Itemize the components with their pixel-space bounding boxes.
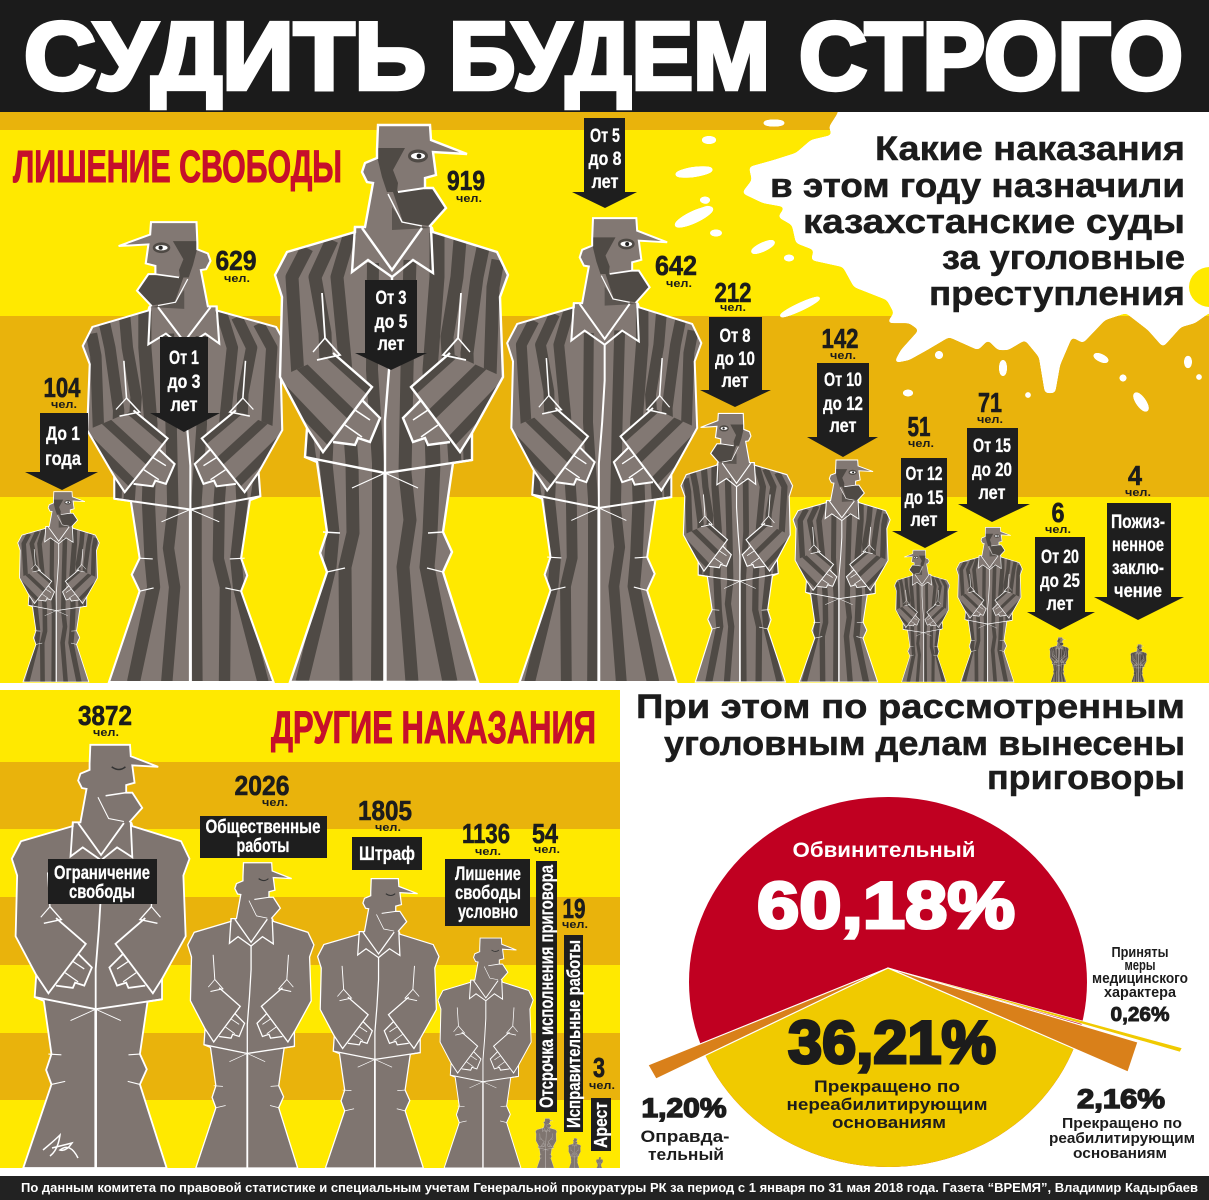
arrow: 1 to 3 years [150, 337, 220, 432]
count: 6 [1045, 497, 1071, 536]
count: 51: 51 [908, 411, 930, 442]
figure: arrest [596, 1157, 603, 1168]
label: exonerating: реабилитирующим [1049, 1130, 1195, 1147]
count: 629: 629 [216, 245, 256, 276]
count: 1805: чел. [375, 822, 401, 834]
arrow: 15 to 20 years: От 15 [973, 436, 1011, 457]
label: non-exonerating: Прекращено по [814, 1077, 960, 1096]
figure: 20 to 25 years [1049, 637, 1069, 682]
count: 19: чел. [562, 919, 588, 931]
label: suspended sentence [445, 859, 530, 926]
heading: deprivation of liberty: ЛИШЕНИЕ СВОБОДЫ [13, 141, 342, 192]
arrow: up to 1 year: До 1 [46, 424, 80, 445]
pie slice: medical measures [888, 968, 1182, 1052]
arrow: up to 1 year: года [45, 449, 81, 470]
figure: suspended sentence [438, 938, 533, 1168]
count: 104 [44, 372, 81, 411]
heading: what punishments: преступления [929, 275, 1185, 313]
arrow: 20 to 25 years [1027, 537, 1095, 630]
label: acquitted [640, 1093, 730, 1164]
count: 104: 104 [44, 372, 81, 403]
count: 2026: 2026 [234, 770, 290, 801]
label: restriction of liberty [48, 859, 157, 904]
count: 54: чел. [534, 844, 560, 856]
count: 212 [714, 277, 752, 314]
arrow: 8 to 10 years: до 10 [715, 349, 755, 370]
figure: up to 1 year [18, 492, 99, 682]
figure: community service [188, 863, 314, 1168]
figure: 10 to 12 years [793, 460, 890, 682]
label: exonerating: Прекращено по [1062, 1115, 1182, 1132]
label: non-exonerating: нереабилитирующим [786, 1095, 988, 1114]
white paint splash [672, 90, 1209, 415]
count: 212: 212 [714, 277, 752, 308]
arrow: 20 to 25 years: до 25 [1040, 571, 1080, 592]
striped background bands [0, 690, 620, 1168]
arrow: 15 to 20 years [958, 428, 1030, 522]
label: acquitted: 1,20% [642, 1093, 726, 1123]
arrow: 8 to 10 years: лет [722, 371, 748, 392]
label: suspended sentence: свободы [455, 883, 521, 904]
figure: life sentence [1130, 644, 1147, 682]
count: 1136: чел. [475, 846, 501, 858]
header band with title: СУДИТЬ [24, 3, 426, 110]
footer source line: По данным комитета по правовой статистике и специальным учетам Генеральной прокуратуры РК за период с 1 января по 31 мая 2018 года. Газета “ВРЕМЯ”, Владимир Кадырбаев [21, 1180, 1198, 1195]
arrow: 1 to 3 years: От 1 [169, 348, 199, 369]
count: 19: 19 [562, 893, 586, 924]
count: 104: чел. [51, 399, 77, 411]
arrow: 12 to 15 years: От 12 [906, 464, 942, 485]
arrow: 20 to 25 years: От 20 [1041, 547, 1079, 568]
label: fine: Штраф [359, 844, 415, 865]
arrow: 5 to 8 years: лет [592, 172, 618, 193]
arrow: life sentence: чение [1114, 581, 1162, 602]
arrow: 1 to 3 years: лет [170, 395, 198, 416]
count: 4: 4 [1128, 460, 1142, 491]
chart: verdicts pie [640, 797, 1195, 1167]
label: suspended sentence: условно [458, 902, 518, 923]
count: 212: чел. [720, 302, 746, 314]
arrow: 5 to 8 years [572, 118, 637, 208]
count: 6: 6 [1052, 497, 1064, 528]
count: 1136 [462, 818, 510, 858]
count: 3 [589, 1052, 615, 1092]
arrow: 10 to 12 years: до 12 [823, 394, 863, 415]
label: exonerating [1049, 1084, 1195, 1162]
arrow: 3 to 5 years: лет [378, 334, 404, 355]
pie slice: acquitted [648, 968, 888, 1079]
arrow: 12 to 15 years [892, 458, 958, 548]
figure: 5 to 8 years [507, 218, 701, 682]
label: medical measures: 0,26% [1110, 1004, 1170, 1026]
arrow: 1 to 3 years: до 3 [168, 372, 200, 393]
arrow: 3 to 5 years [355, 280, 427, 370]
count: 3: 3 [593, 1052, 605, 1083]
arrow: 10 to 12 years: От 10 [824, 370, 862, 391]
count: 3872: 3872 [78, 700, 132, 731]
heading: verdicts: уголовным делам вынесены [664, 725, 1185, 763]
yellow drop on right edge [1189, 267, 1209, 307]
figure: 12 to 15 years [894, 550, 950, 682]
panel: deprivation of liberty [0, 90, 1209, 683]
figure: fine [318, 879, 439, 1168]
panel: other punishments [0, 690, 620, 1168]
count: 142: чел. [830, 350, 856, 362]
count: 642: чел. [666, 278, 692, 290]
count: 629 [216, 245, 256, 285]
count: 1136: 1136 [462, 818, 510, 849]
figure: 8 to 10 years [681, 413, 793, 682]
count: 4: чел. [1125, 487, 1151, 499]
figure: deferred sentence [535, 1118, 557, 1168]
label: community service: работы [236, 836, 290, 857]
count: 4 [1125, 460, 1151, 499]
count: 642: 642 [655, 250, 697, 281]
label: arrest: Арест [591, 1102, 611, 1148]
count: 3: чел. [589, 1080, 615, 1092]
count: 919: 919 [447, 165, 485, 196]
label: exonerating: 2,16% [1077, 1084, 1165, 1114]
label: community service [200, 816, 327, 858]
label: medical measures: Приняты [1112, 944, 1168, 961]
label: medical measures: характера [1104, 984, 1177, 1001]
heading: verdicts [636, 688, 1185, 797]
count: 6: чел. [1045, 524, 1071, 536]
label: community service: Общественные [206, 817, 320, 838]
arrow: life sentence [1094, 503, 1184, 620]
count: 142 [822, 323, 858, 362]
count: 919: чел. [456, 193, 482, 205]
label: non-exonerating [786, 1009, 996, 1132]
count: 71 [977, 387, 1003, 426]
label: guilty: 60,18% [757, 868, 1015, 942]
figure: correctional labour [568, 1138, 581, 1168]
heading: what punishments [770, 130, 1185, 313]
footer source line [0, 1176, 1209, 1200]
count: 1805: 1805 [358, 795, 412, 826]
count: 51: чел. [908, 438, 934, 450]
label: deferred sentence: Отсрочка исполнения приговора [537, 865, 558, 1108]
arrow: 8 to 10 years: От 8 [720, 326, 750, 347]
count: 19 [562, 893, 588, 931]
header band with title: СТРОГО [799, 3, 1183, 110]
arrow: 5 to 8 years: От 5 [590, 126, 620, 147]
arrow: 5 to 8 years: до 8 [588, 149, 622, 170]
arrow: life sentence: Пожиз- [1111, 512, 1165, 533]
label: correctional labour: Исправительные работы [564, 940, 584, 1128]
label: restriction of liberty: Ограничение [54, 863, 150, 884]
label: non-exonerating: основаниям [832, 1113, 946, 1132]
heading: what punishments: Какие наказания [875, 130, 1185, 168]
arrow: life sentence: ненное [1112, 535, 1164, 556]
count: 2026: чел. [262, 797, 288, 809]
label: guilty: Обвинительный [792, 839, 976, 862]
heading: what punishments: за уголовные [942, 239, 1185, 277]
label: medical measures: медицинского [1092, 970, 1188, 987]
pie slice: terminated exonerating [888, 968, 1138, 1072]
arrow: life sentence: заклю- [1112, 558, 1164, 579]
arrow: 10 to 12 years: лет [830, 416, 856, 437]
count: 3872: чел. [93, 727, 119, 739]
heading: what punishments: казахстанские суды [803, 203, 1185, 241]
figure: 1 to 3 years [83, 222, 287, 682]
pie slice: guilty [689, 797, 1087, 1167]
heading: verdicts: приговоры [987, 759, 1185, 797]
count: 629: чел. [224, 273, 250, 285]
figure: restriction of liberty [12, 745, 189, 1168]
arrow: up to 1 year [25, 413, 98, 490]
count: 71: чел. [977, 414, 1003, 426]
heading: what punishments: в этом году назначили [770, 167, 1185, 205]
arrow: 15 to 20 years: до 20 [972, 460, 1012, 481]
arrow: 12 to 15 years: лет [910, 510, 938, 531]
count: 919 [447, 165, 485, 205]
arrow: 12 to 15 years: до 15 [904, 488, 944, 509]
heading: other punishments: ДРУГИЕ НАКАЗАНИЯ [271, 702, 596, 753]
artist signature [43, 1135, 78, 1158]
arrow: 20 to 25 years: лет [1046, 594, 1074, 615]
figure: 15 to 20 years [956, 527, 1022, 682]
arrow: 10 to 12 years [807, 363, 878, 457]
figure: 3 to 5 years [275, 125, 508, 682]
label: guilty [757, 839, 1015, 942]
count: 51 [908, 411, 934, 450]
header band with title: БУДЕМ [449, 3, 770, 110]
striped background bands [0, 112, 1209, 683]
heading: verdicts: При этом по рассмотренным [636, 688, 1185, 726]
count: 142: 142 [822, 323, 858, 354]
label: non-exonerating: 36,21% [788, 1009, 996, 1076]
label: acquitted: тельный [648, 1145, 724, 1164]
arrow: 3 to 5 years: От 3 [376, 288, 406, 309]
label: fine [352, 837, 422, 870]
count: 54: 54 [532, 818, 558, 849]
label: restriction of liberty: свободы [69, 882, 135, 903]
count: 71: 71 [978, 387, 1002, 418]
label: suspended sentence: Лишение [455, 864, 521, 885]
label: exonerating: основаниям [1073, 1145, 1167, 1162]
label: medical measures: меры [1124, 957, 1156, 974]
arrow: 3 to 5 years: до 5 [374, 312, 408, 333]
header band with title [0, 0, 1209, 112]
arrow: 8 to 10 years [700, 317, 771, 407]
label: acquitted: Оправда- [640, 1127, 730, 1146]
arrow: 15 to 20 years: лет [978, 483, 1006, 504]
label: medical measures [1092, 944, 1188, 1026]
pie slice: terminated non-exonerating [706, 968, 1074, 1167]
